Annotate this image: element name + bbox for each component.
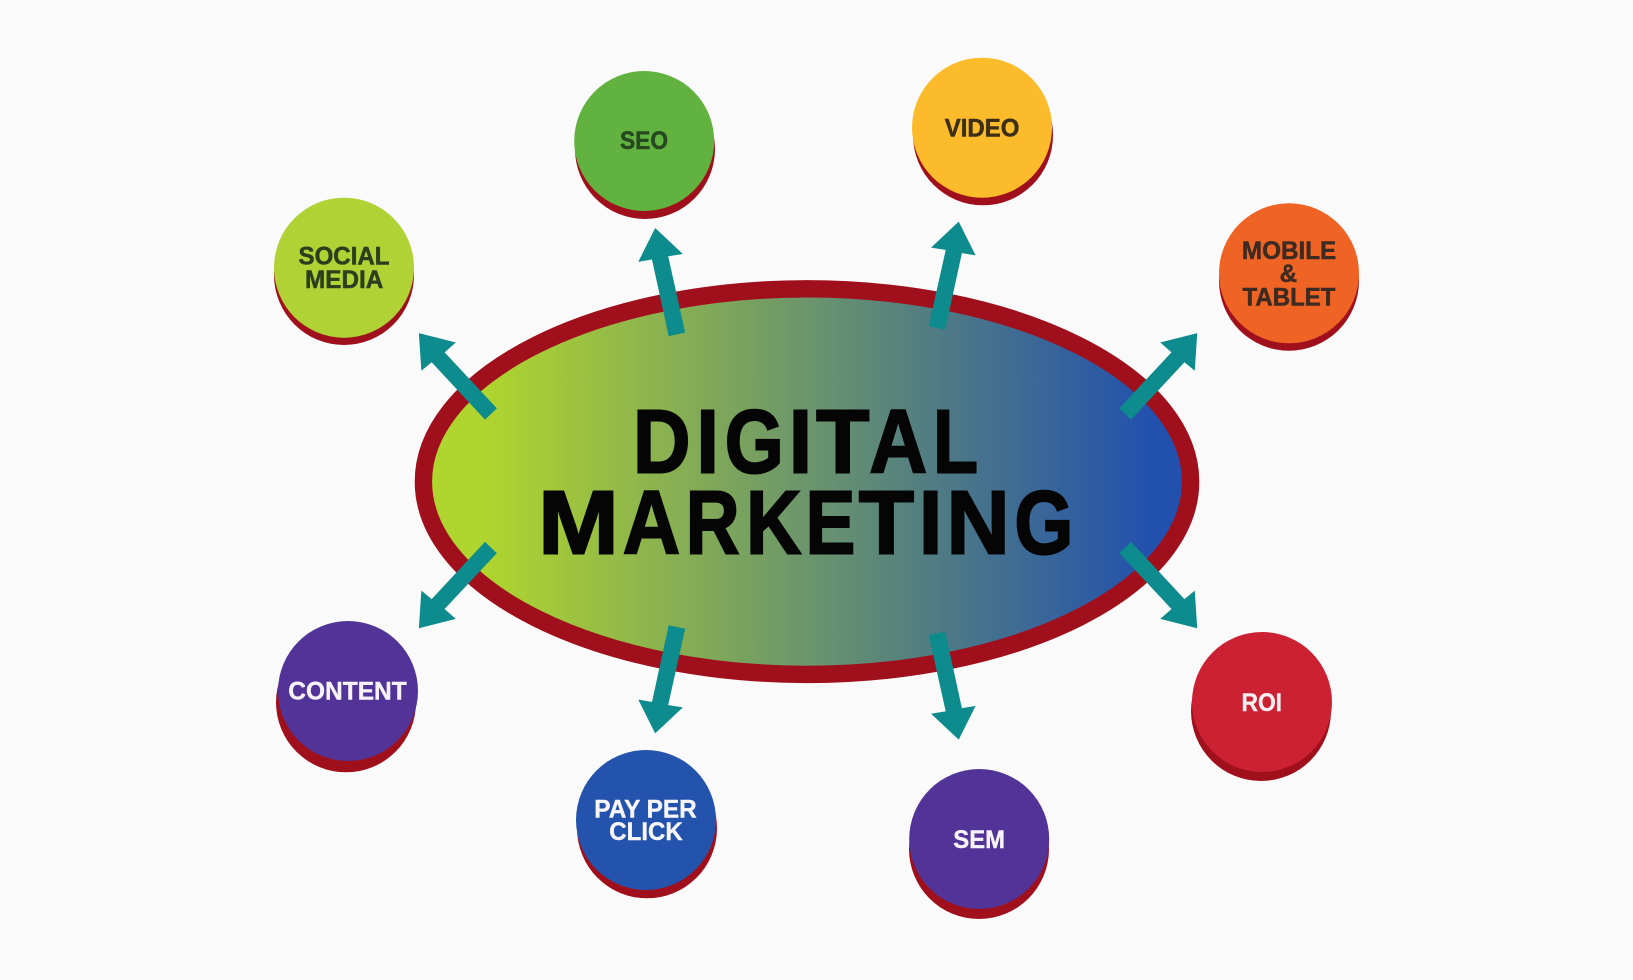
title: digital marketing: I [789,392,812,492]
label: roi: ROI [1242,689,1282,717]
label: mobile and tablet: TABLET [1242,283,1336,311]
title: digital marketing: E [806,473,855,573]
node: sem [909,769,1049,919]
node: social media [274,198,414,345]
title: digital marketing: G [725,392,784,492]
label: mobile and tablet: MOBILE [1242,237,1336,265]
label: social media: SOCIAL [298,243,390,271]
arrow: to mobile and tablet [1120,334,1197,419]
node: pay per click [576,750,717,898]
label: mobile and tablet: & [1280,260,1297,288]
label: seo: SEO [620,127,668,155]
node: roi [1191,632,1332,781]
arrow: to social media [419,334,496,419]
label: pay per click: CLICK [609,818,683,846]
title: digital marketing [538,392,1073,573]
node: mobile and tablet [1219,203,1359,351]
label: mobile and tablet [1242,237,1336,311]
title: digital marketing: R [686,473,740,573]
node: seo [574,71,715,219]
label: video: VIDEO [945,115,1019,143]
title: digital marketing: L [933,392,978,492]
title: digital marketing: I [696,392,719,492]
central ellipse [423,289,1191,674]
arrow: to roi [1120,542,1197,628]
label: pay per click [594,795,697,846]
title: digital marketing: K [746,473,801,573]
title: digital marketing: D [633,392,690,492]
node: content [276,621,418,772]
label: sem: SEM [953,826,1005,854]
title: digital marketing: T [859,473,914,573]
title: digital marketing: I [919,473,942,573]
title: digital marketing: G [1014,473,1073,573]
label: content: CONTENT [288,678,407,706]
title: digital marketing: T [816,392,869,492]
arrow: to video [929,222,975,329]
label: social media: MEDIA [305,266,383,294]
title: digital marketing: N [946,473,1010,573]
arrow: to pay per click [639,626,685,733]
title: digital marketing: A [623,473,680,573]
arrow: to sem [929,632,975,739]
title: digital marketing: A [869,392,927,492]
label: pay per click: PAY PER [594,795,697,823]
node: video [912,58,1053,205]
arrow: to seo [639,229,685,336]
arrow: to content [419,542,496,628]
title: digital marketing: M [538,473,619,573]
label: social media [298,243,390,294]
